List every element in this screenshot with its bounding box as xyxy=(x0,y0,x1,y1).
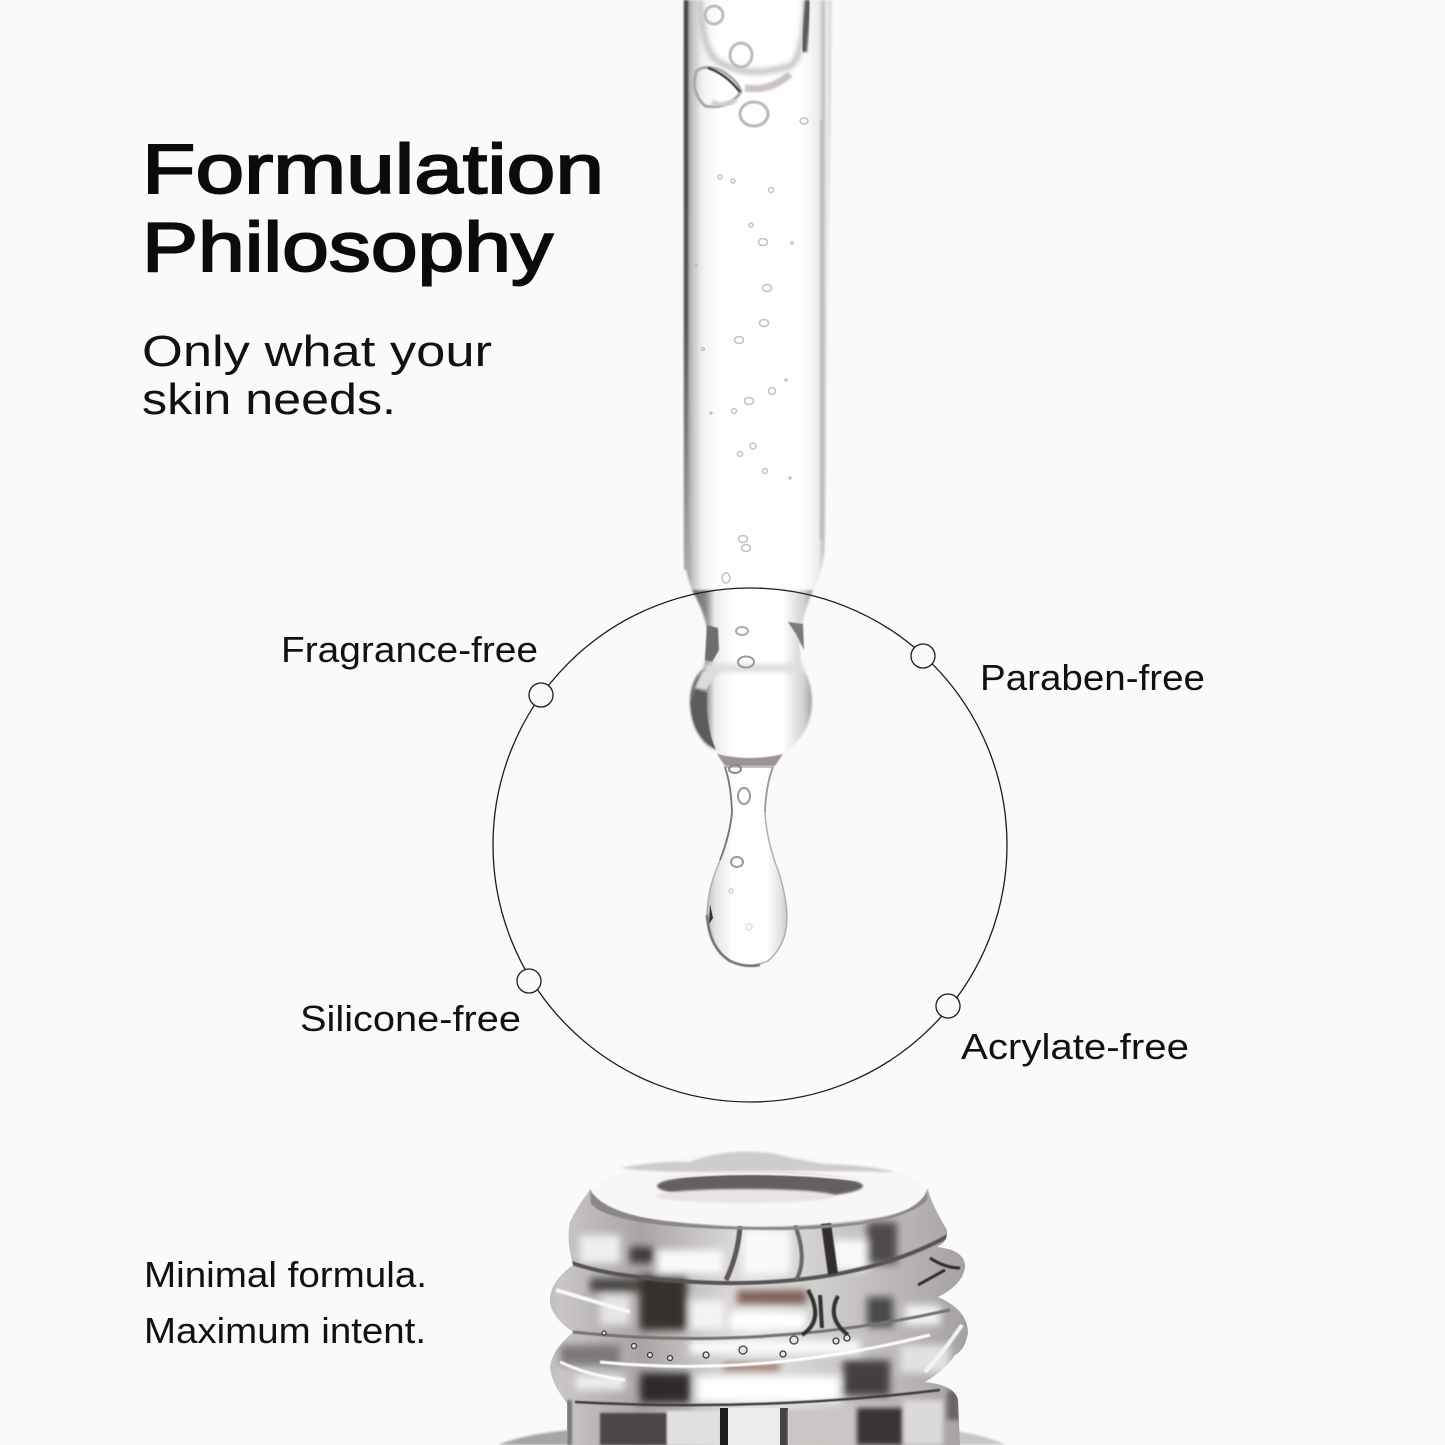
air pocket at top of pipette xyxy=(694,0,808,126)
glass tube xyxy=(683,0,832,592)
label: silicone-free: Silicone-free xyxy=(300,998,521,1039)
title: Philosophy xyxy=(142,208,553,286)
bottle shoulder xyxy=(498,1430,1006,1445)
label: fragrance-free: Fragrance-free xyxy=(281,629,538,670)
pipette with serum drop xyxy=(683,0,832,966)
thread shadow lines xyxy=(556,1223,962,1405)
bubbles on bottle neck xyxy=(602,1331,850,1360)
bottle rim xyxy=(590,1152,928,1230)
title xyxy=(142,130,604,286)
tagline: Maximum intent. xyxy=(144,1310,426,1351)
subtitle: Only what your xyxy=(142,327,492,376)
tagline: Minimal formula. xyxy=(144,1254,427,1295)
marker: paraben-free xyxy=(911,644,935,668)
marker: fragrance-free xyxy=(529,683,553,707)
lower neck blocks xyxy=(567,1390,960,1445)
marker: acrylate-free xyxy=(936,994,960,1018)
subtitle: skin needs. xyxy=(142,375,396,424)
ring xyxy=(493,588,1007,1102)
pipette tip neck and bulb xyxy=(690,590,813,767)
ingredient circle xyxy=(493,588,1007,1102)
bottle neck xyxy=(550,1190,968,1445)
falling drop xyxy=(707,765,787,966)
label: acrylate-free: Acrylate-free xyxy=(961,1026,1189,1067)
marker: silicone-free xyxy=(517,969,541,993)
subtitle xyxy=(142,327,492,424)
glass reflections xyxy=(560,1222,950,1403)
tagline xyxy=(144,1254,427,1351)
bubbles in tube xyxy=(695,118,808,583)
label: paraben-free: Paraben-free xyxy=(980,657,1205,698)
infographic canvas xyxy=(143,0,1204,1445)
title: Formulation xyxy=(142,130,604,208)
